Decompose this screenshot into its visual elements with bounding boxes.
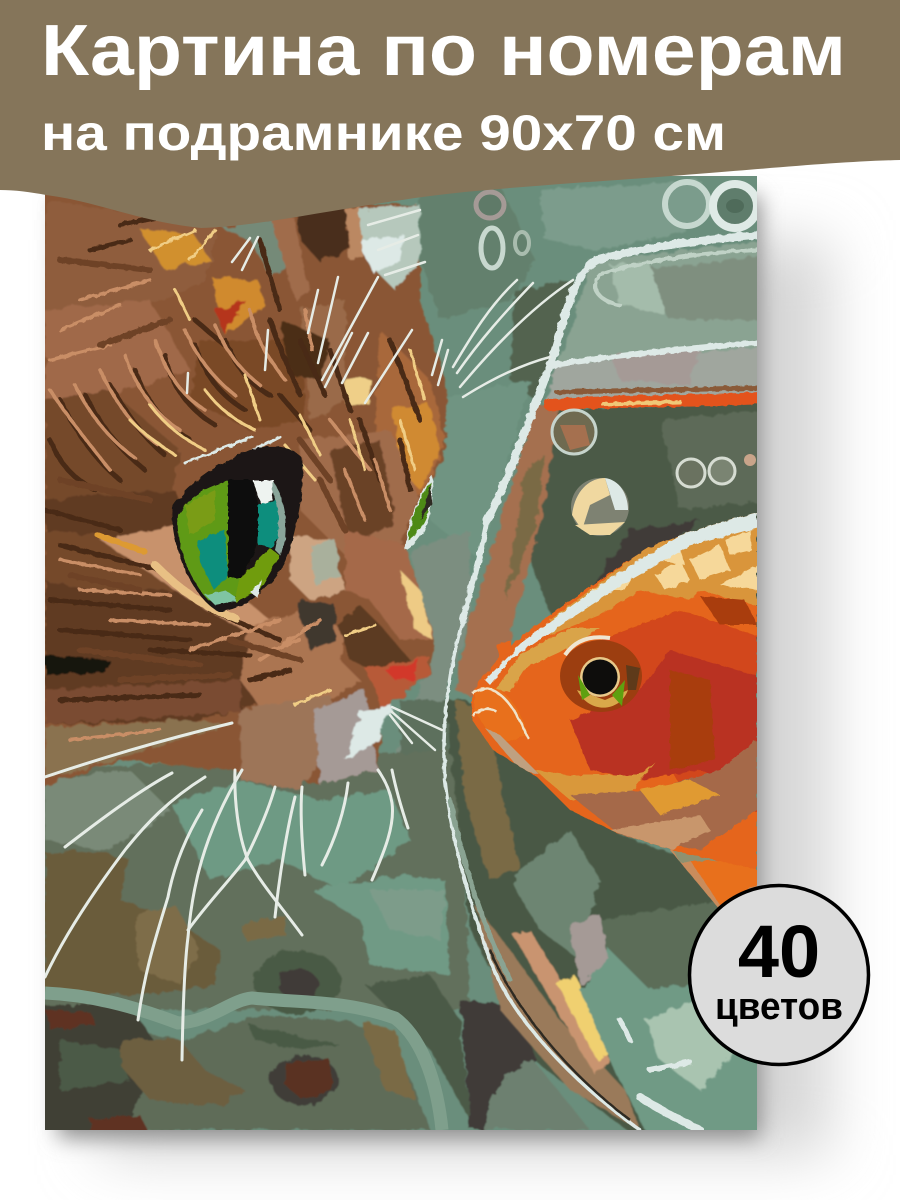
subtitle: на подрамнике 90х70 см — [41, 105, 726, 161]
painting background — [30, 160, 770, 1140]
far cat eye — [405, 475, 433, 550]
goldfish — [472, 505, 770, 910]
bubbles — [476, 182, 757, 536]
cat head — [30, 180, 447, 790]
whiskers — [45, 210, 573, 1060]
painting — [30, 160, 770, 1140]
badge: 40 colours: 40 — [738, 910, 820, 993]
badge: 40 colours — [690, 886, 868, 1064]
fish tail — [670, 849, 757, 908]
bowl glass and water — [445, 240, 770, 1140]
near cat eye — [172, 447, 303, 611]
fish eye — [560, 637, 642, 712]
fishbowl — [444, 182, 770, 1140]
top banner — [0, 0, 900, 228]
canvas shadow — [58, 196, 830, 1155]
title: Картина по номерам — [41, 11, 846, 91]
bowl highlights — [444, 235, 760, 1130]
fur strokes — [45, 215, 425, 740]
table band — [45, 993, 442, 1130]
badge: 40 colours: цветов — [715, 986, 843, 1028]
fish body — [472, 505, 770, 870]
